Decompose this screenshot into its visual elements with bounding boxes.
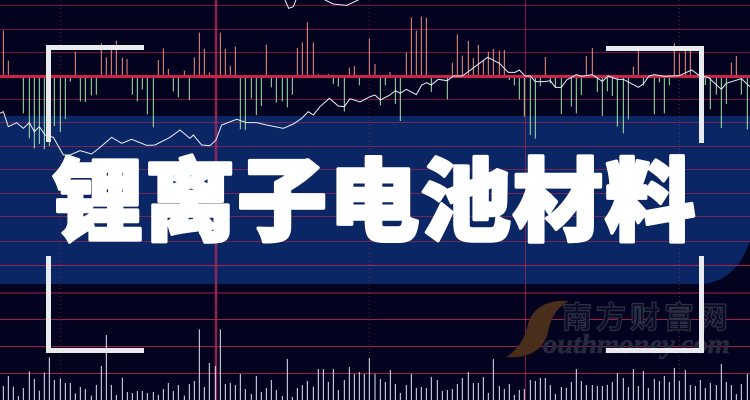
white price line, right half <box>375 57 750 100</box>
blue title band <box>0 116 750 284</box>
corner bracket: bottom right <box>606 256 702 350</box>
green volume bars, right half <box>380 76 747 139</box>
corner bracket: top right <box>606 48 702 143</box>
watermark: Southmoney logo <box>506 301 732 359</box>
white price line, left half <box>0 0 375 155</box>
white lower bars, left half <box>3 329 369 400</box>
corner bracket: bottom left <box>48 256 144 350</box>
red volume bars, left half <box>3 22 369 76</box>
red zero axis <box>0 75 750 78</box>
watermark web address: outhmoney.com <box>543 329 730 359</box>
white lower bars, right half <box>375 359 747 400</box>
watermark S swoosh <box>506 301 569 357</box>
corner bracket: top left <box>48 48 144 142</box>
green volume bars, left half <box>23 76 359 149</box>
title: 锂离子电池材料 <box>53 153 695 253</box>
vertical marker line <box>215 0 217 400</box>
watermark Chinese name: 南方财富网 <box>562 302 732 335</box>
red volume bars, right half <box>375 17 736 76</box>
